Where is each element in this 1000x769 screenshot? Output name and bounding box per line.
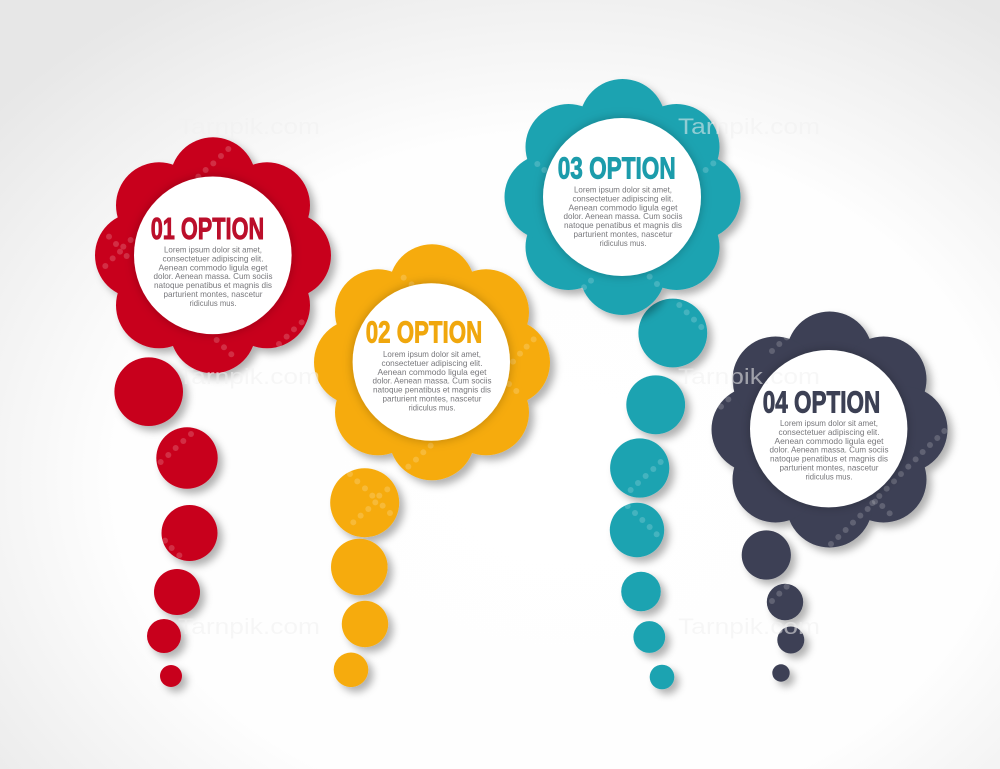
- body text: ridiculus mus.: [190, 299, 236, 308]
- body text: Lorem ipsum dolor sit amet,: [383, 350, 481, 359]
- body text: consectetuer adipiscing elit.: [778, 428, 880, 437]
- body text: [154, 246, 272, 308]
- body text: Lorem ipsum dolor sit amet,: [780, 419, 878, 428]
- panel: option 04 (navy): [712, 312, 948, 682]
- heading: 02 OPTION: 02 OPTION: [366, 315, 482, 350]
- stem circles: navy: [742, 530, 804, 682]
- body text: consectetuer adipiscing elit.: [162, 254, 264, 263]
- stem circles: teal: [610, 299, 707, 689]
- body text: parturient montes, nascetur: [574, 230, 673, 239]
- body text: parturient montes, nascetur: [780, 464, 879, 472]
- heading: 01 OPTION: 01 OPTION: [151, 211, 264, 246]
- body text: consectetuer adipiscing elit.: [572, 194, 674, 203]
- watermarks: Tarnpik.com: [178, 364, 320, 389]
- body text: ridiculus mus.: [600, 239, 646, 248]
- body text: dolor. Aenean massa. Cum sociis: [564, 212, 682, 221]
- body text: natoque penatibus et magnis dis: [564, 221, 682, 230]
- panel: option 03 (teal): [504, 79, 740, 689]
- body text: dolor. Aenean massa. Cum sociis: [770, 446, 888, 455]
- body text: [372, 350, 492, 412]
- watermark dots: red circles: [158, 431, 194, 558]
- white centre circle: [134, 176, 292, 334]
- body text: dolor. Aenean massa. Cum sociis: [372, 377, 492, 386]
- watermark dots: orange flower: [401, 275, 537, 470]
- heading: 04 OPTION: 04 OPTION: [763, 384, 880, 419]
- body text: [564, 186, 682, 248]
- watermark dots: navy circle: [769, 584, 790, 604]
- body text: Lorem ipsum dolor sit amet,: [574, 186, 672, 194]
- body text: natoque penatibus et magnis dis: [373, 386, 491, 395]
- body text: natoque penatibus et magnis dis: [154, 281, 272, 290]
- body text: natoque penatibus et magnis dis: [770, 455, 888, 464]
- watermarks: Tarnpik.com: [178, 114, 320, 139]
- body text: Aenean commodo ligula eget: [774, 437, 884, 446]
- stem circles: red: [114, 357, 218, 687]
- watermarks: Tarnpik.com: [178, 614, 320, 639]
- white centre circle: [353, 283, 510, 441]
- stem circles: orange: [330, 468, 399, 687]
- watermarks: [178, 114, 820, 639]
- watermark dots: navy flower: [718, 334, 947, 547]
- body text: ridiculus mus.: [408, 403, 456, 412]
- watermark dots: teal circles: [625, 302, 704, 537]
- body text: Aenean commodo ligula eget: [158, 263, 268, 272]
- panel: option 01 (red): [95, 137, 331, 687]
- flower shape: orange: [314, 244, 550, 480]
- heading: 03 OPTION: 03 OPTION: [558, 151, 676, 186]
- body text: Aenean commodo ligula eget: [568, 203, 678, 212]
- watermark dots: red flower: [102, 146, 305, 357]
- white centre circle: [543, 118, 701, 276]
- body text: dolor. Aenean massa. Cum sociis: [154, 272, 272, 281]
- body text: ridiculus mus.: [806, 472, 852, 481]
- body text: Aenean commodo ligula eget: [378, 368, 487, 377]
- watermark dots: orange circle: [347, 471, 393, 525]
- white centre circle: [750, 350, 907, 507]
- body text: Lorem ipsum dolor sit amet,: [164, 246, 262, 254]
- panel: option 02 (orange): [314, 244, 550, 687]
- flower shape: navy: [712, 312, 948, 548]
- watermark dots: teal flower: [534, 160, 716, 290]
- flower shape: red: [95, 137, 331, 373]
- body text: [770, 419, 888, 481]
- body text: parturient montes, nascetur: [164, 290, 263, 299]
- watermarks: Tarnpik.com: [678, 364, 820, 389]
- watermarks: Tarnpik.com: [678, 614, 820, 639]
- body text: parturient montes, nascetur: [382, 394, 482, 404]
- body text: consectetuer adipiscing elit.: [382, 359, 482, 368]
- watermarks: Tarnpik.com: [678, 114, 820, 139]
- flower shape: teal: [504, 79, 740, 315]
